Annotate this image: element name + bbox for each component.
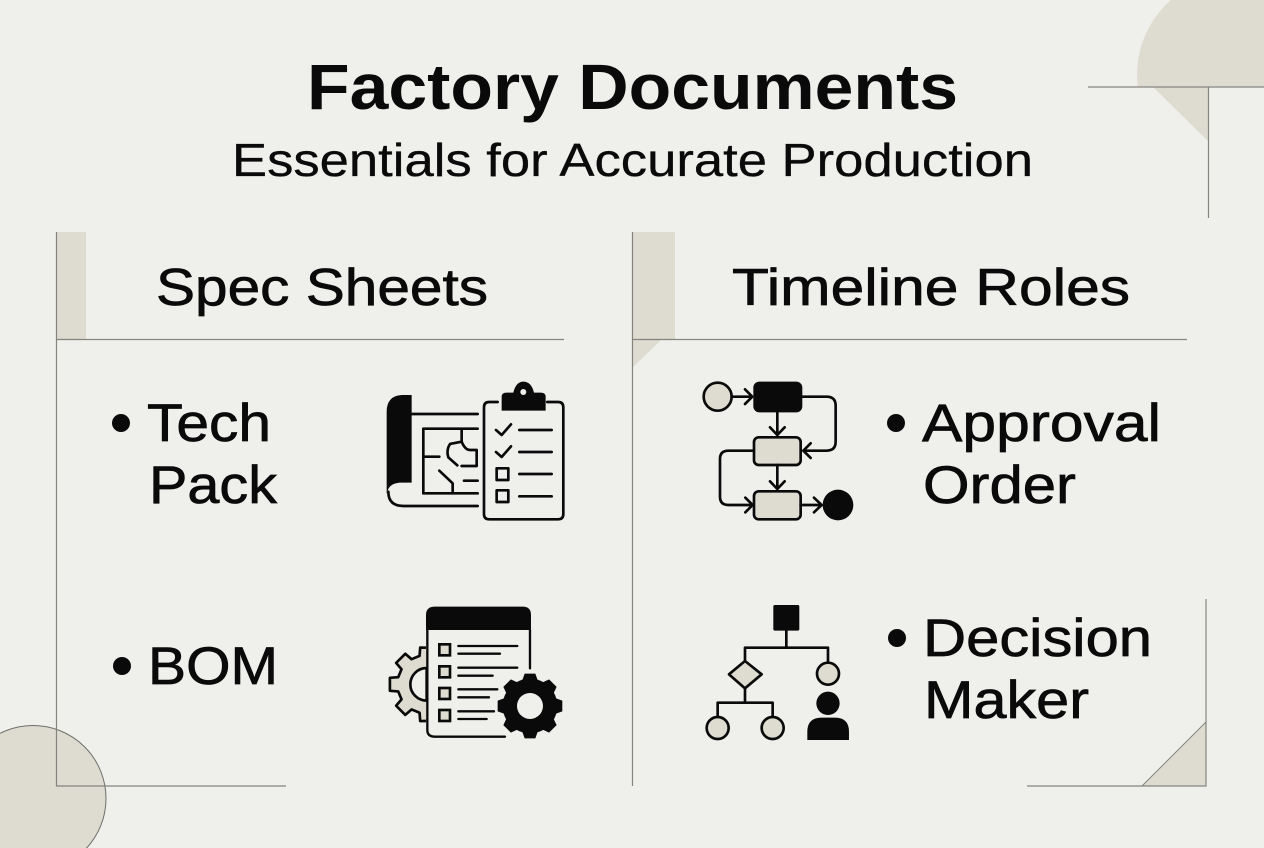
- subtitle: Essentials for Accurate Production: [232, 134, 1033, 186]
- list item: bom: BOM: [148, 637, 278, 696]
- panel: timeline roles: [632, 232, 1206, 786]
- list item: approval order: [887, 394, 1161, 515]
- list item: tech pack: [112, 394, 278, 515]
- icon: bill of materials sheet with gears: [390, 607, 562, 738]
- panel: spec sheets: [56, 232, 564, 786]
- list item: approval order: Order: [923, 456, 1076, 515]
- decoration: bottom left circle: [0, 726, 106, 848]
- heading: spec sheets: Spec Sheets: [156, 259, 488, 317]
- icon: decision tree with person: [707, 605, 849, 740]
- list item: decision maker: [888, 609, 1152, 730]
- heading: timeline roles: Timeline Roles: [732, 259, 1130, 317]
- title: Factory Documents: [307, 51, 958, 123]
- list item: approval order: Approval: [922, 394, 1161, 453]
- icon: blueprint and checklist clipboard: [387, 382, 563, 519]
- list item: decision maker: Decision: [923, 609, 1152, 668]
- list item: tech pack: Tech: [147, 394, 271, 453]
- list item: decision maker: Maker: [924, 671, 1089, 730]
- decoration: top right circle and lines: [1088, 0, 1264, 218]
- list item: tech pack: Pack: [149, 456, 278, 515]
- icon: approval flowchart: [704, 382, 853, 520]
